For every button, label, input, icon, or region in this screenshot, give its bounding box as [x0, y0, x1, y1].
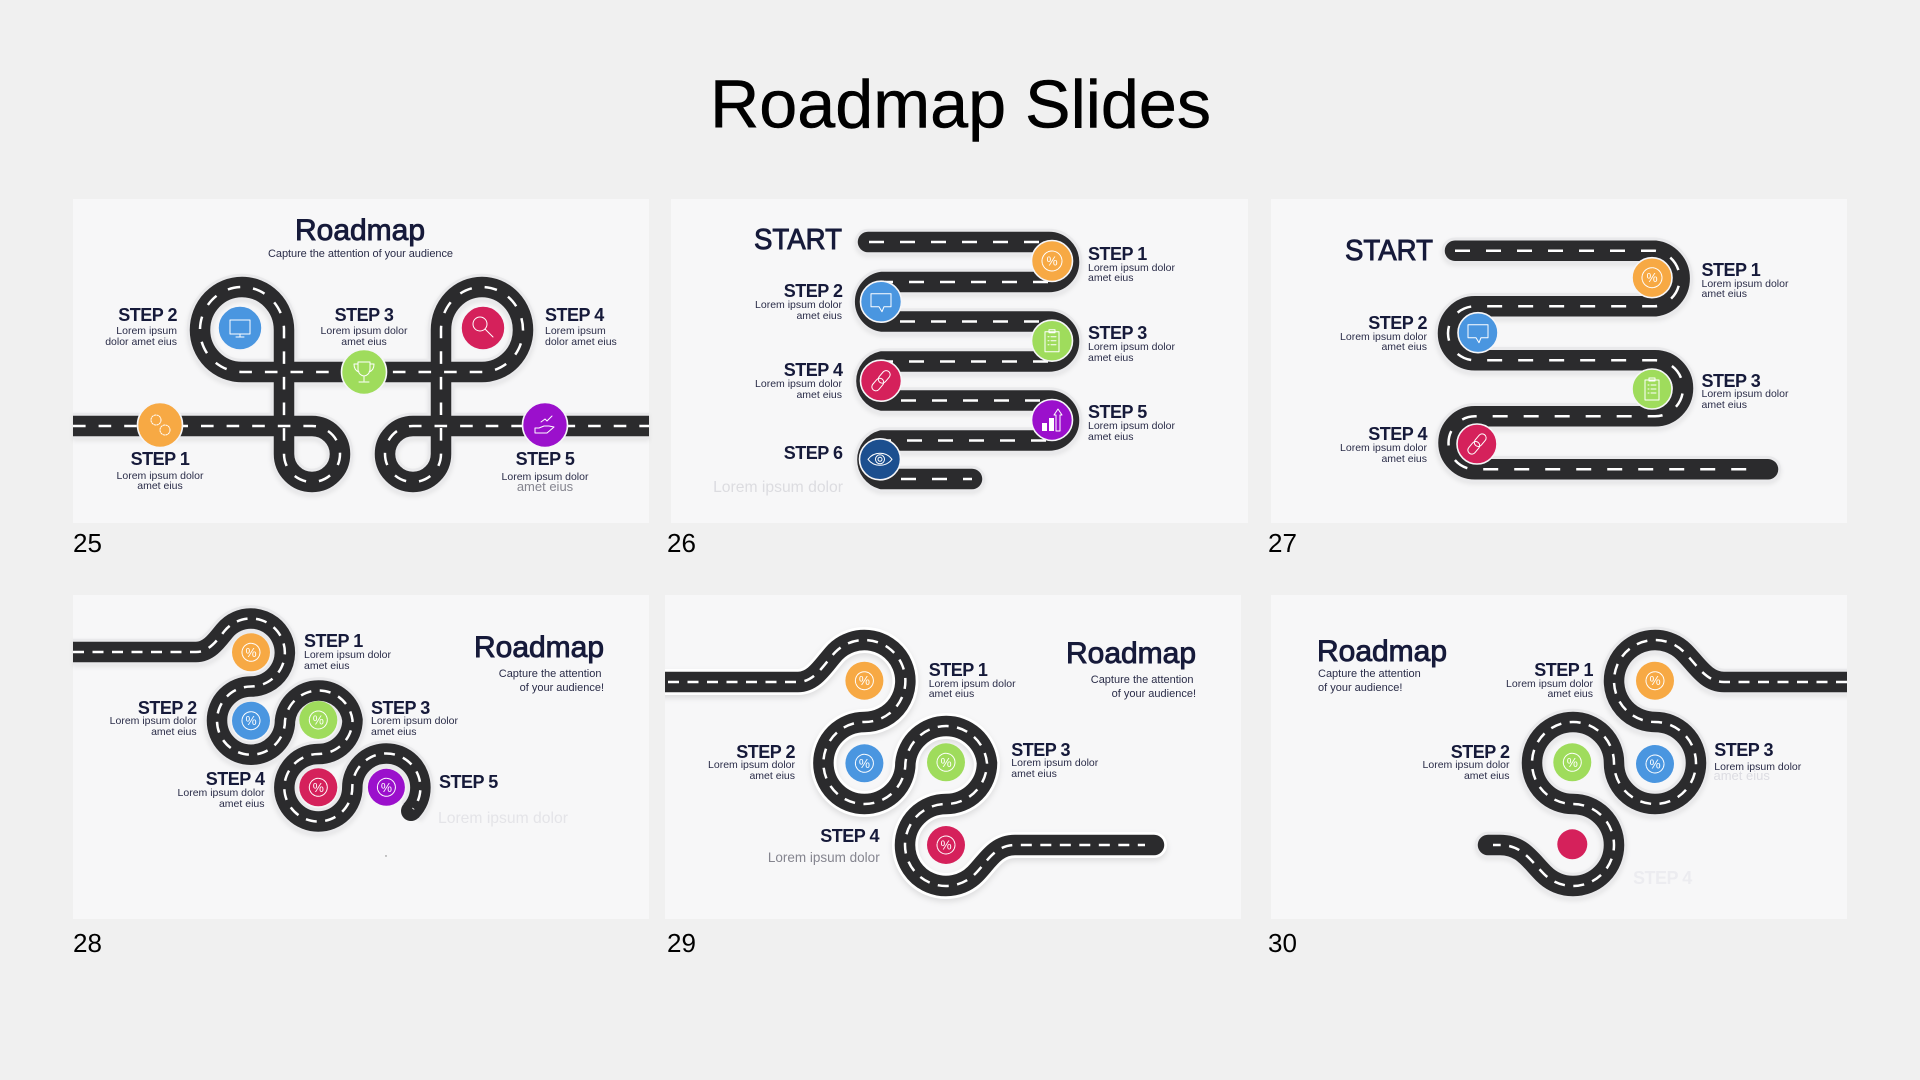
text: step 1: STEP 1 — [1702, 260, 1761, 280]
text: step 3 — [321, 305, 408, 348]
text: step 4 — [178, 769, 265, 810]
text: step 1 — [117, 449, 204, 492]
text: step 4: dolor amet eius — [545, 336, 617, 348]
text: step 4 — [1340, 424, 1428, 465]
marker: step 1 percent: % — [1646, 271, 1658, 285]
text: step 2 — [110, 698, 197, 738]
text: step 4: amet eius — [1381, 453, 1427, 465]
marker: step 1 percent — [1632, 258, 1672, 298]
text: step 2: Lorem ipsum dolor — [708, 759, 796, 771]
text: step 1: STEP 1 — [1534, 660, 1593, 680]
text: step 1 — [304, 631, 391, 672]
marker: step 2 percent: % — [1567, 756, 1578, 770]
text: step 5: Lorem ipsum dolor — [502, 471, 589, 483]
text: step 3 — [1011, 740, 1099, 780]
marker: step 5 percent — [368, 769, 405, 806]
text: step 1: STEP 1 — [929, 660, 988, 680]
text: step 3: STEP 3 — [1088, 323, 1147, 343]
road: slide 26 — [865, 242, 1069, 479]
text: step 2: Lorem ipsum dolor — [755, 299, 843, 311]
text: step 5: Lorem ipsum dolor — [438, 810, 568, 827]
subtitle: slide 30 — [1318, 668, 1421, 694]
text: step 4: STEP 4 — [1368, 424, 1427, 444]
text: step 4 — [768, 826, 880, 865]
text: step 6: STEP 6 — [784, 443, 843, 463]
text: step 1: Lorem ipsum dolor — [304, 649, 391, 661]
panel: slide 26 — [671, 199, 1248, 523]
marker: step 3 clipboard — [1632, 369, 1672, 409]
text: step 1: amet eius — [1547, 688, 1593, 700]
text: step 2: Lorem ipsum dolor — [1340, 331, 1428, 343]
text: step 5: STEP 5 — [1088, 402, 1147, 422]
marker: step 4 link — [1457, 424, 1497, 464]
text: step 3: Lorem ipsum dolor — [1714, 761, 1802, 773]
slide number 28: 28 — [73, 928, 102, 958]
marker: step 3 percent — [1636, 745, 1674, 783]
marker: step 4 magnifier — [461, 306, 505, 350]
heading: slide 25: Roadmap — [295, 214, 425, 247]
road: slide 28 — [73, 619, 421, 822]
panel: slide 30 — [1318, 630, 1847, 896]
marker: step 3 percent: % — [1649, 758, 1661, 772]
subtitle: slide 29 — [1091, 674, 1196, 700]
road: slide 30 — [1488, 640, 1860, 886]
text: step 3: amet eius — [1088, 352, 1134, 364]
marker: step 1 percent — [232, 633, 270, 671]
text: step 2: amet eius — [1464, 770, 1510, 782]
marker: step 1 percent: % — [245, 646, 257, 660]
marker: step 1 percent — [1636, 662, 1674, 700]
panel: slide 28 — [73, 595, 649, 919]
road: slide 25 — [73, 287, 649, 482]
text: step 2: amet eius — [749, 770, 795, 782]
text: step 2: amet eius — [151, 726, 197, 738]
text: step 4 — [755, 360, 843, 401]
panel: slide 27 — [1271, 199, 1847, 523]
text: step 1 — [1702, 260, 1789, 300]
marker: step 4 percent — [299, 768, 337, 806]
slide number 26: 26 — [667, 528, 696, 558]
marker: step 5 percent: % — [381, 781, 392, 795]
text: step 5: Lorem ipsum dolor — [1088, 420, 1175, 432]
text: step 4: Lorem ipsum dolor — [178, 787, 265, 799]
text: step 1: Lorem ipsum dolor — [1702, 278, 1789, 290]
text: step 3: amet eius — [1011, 768, 1057, 780]
marker: step 1 percent — [1032, 240, 1072, 282]
text: step 3: amet eius — [1714, 768, 1770, 783]
text: step 1: amet eius — [929, 688, 974, 700]
title: Roadmap Slides — [710, 66, 1211, 142]
road: slide 29 — [655, 640, 1154, 886]
text: step 4: STEP 4 — [784, 360, 843, 380]
text: step 4: STEP 4 — [545, 305, 604, 325]
text: step 4 — [545, 305, 617, 348]
text: step 4: STEP 4 — [820, 826, 879, 846]
text: step 1: Lorem ipsum dolor — [1506, 678, 1594, 690]
text: step 5: amet eius — [517, 479, 574, 494]
slide number 30: 30 — [1268, 928, 1297, 958]
text: step 5: STEP 5 — [439, 772, 498, 792]
text: step 5 — [502, 449, 589, 494]
text: step 2: dolor amet eius — [105, 336, 177, 348]
text: step 2: STEP 2 — [1451, 742, 1510, 762]
text: step 3: Lorem ipsum dolor — [1011, 757, 1099, 769]
text: step 3: amet eius — [341, 336, 387, 348]
heading: start: START — [754, 224, 842, 256]
subtitle: slide 29: Capture the attention — [1091, 674, 1194, 686]
text: step 4: Lorem ipsum — [545, 325, 606, 337]
subtitle: slide 29: of your audience! — [1112, 688, 1196, 700]
text: step 3: Lorem ipsum dolor — [371, 715, 458, 727]
text: step 1 — [1506, 660, 1594, 700]
subtitle: slide 25: Capture the attention of your audience — [268, 248, 453, 260]
text: step 4: Lorem ipsum dolor — [768, 850, 880, 865]
text: step 3 — [1714, 740, 1802, 783]
text: step 1: Lorem ipsum dolor — [1088, 262, 1175, 274]
speck — [385, 855, 387, 857]
text: step 1: STEP 1 — [304, 631, 363, 651]
text: step 2 — [105, 305, 177, 348]
marker: step 4 percent: % — [313, 781, 324, 795]
marker: step 3 percent: % — [940, 756, 952, 770]
text: step 2: Lorem ipsum dolor — [110, 715, 197, 727]
text: step 2 — [708, 742, 796, 782]
slide number 25: 25 — [73, 528, 102, 558]
text: step 2: amet eius — [796, 310, 842, 322]
marker: step 2 percent — [1553, 743, 1591, 781]
panel: slide 29 — [665, 627, 1196, 901]
slide number 29: 29 — [667, 928, 696, 958]
marker: step 4 dot — [1557, 829, 1587, 859]
subtitle: slide 30: Capture the attention — [1318, 668, 1421, 680]
text: step 4: amet eius — [796, 389, 842, 401]
text: step 2 — [1340, 313, 1428, 353]
marker: step 2 percent: % — [245, 714, 257, 728]
marker: step 2 monitor — [218, 306, 262, 350]
text: step 3: Lorem ipsum dolor — [321, 325, 408, 337]
marker: step 5 hand chart — [522, 402, 568, 448]
text: step 4: STEP 4 — [206, 769, 265, 789]
text: step 1: amet eius — [137, 480, 183, 492]
slide number 27: 27 — [1268, 528, 1297, 558]
text: step 4: amet eius — [219, 798, 264, 810]
text: step 3: amet eius — [371, 726, 417, 738]
text: step 5 — [1088, 402, 1175, 443]
text: step 2 — [755, 281, 843, 322]
text: step 6 — [713, 443, 843, 496]
marker: step 2 percent — [845, 744, 883, 782]
marker: step 3 percent — [299, 701, 337, 739]
marker: step 3 trophy — [342, 350, 386, 394]
marker: step 2 percent: % — [859, 757, 870, 771]
road: slide 27 — [1448, 251, 1768, 469]
text: step 2: Lorem ipsum — [116, 325, 177, 337]
text: step 1: amet eius — [1088, 272, 1134, 284]
text: step 1: amet eius — [1702, 288, 1747, 300]
marker: step 4 percent — [927, 826, 965, 864]
text: step 2: STEP 2 — [736, 742, 795, 762]
text: step 3: Lorem ipsum dolor — [1702, 388, 1789, 400]
marker: step 4 percent: % — [940, 838, 952, 852]
text: step 2: Lorem ipsum dolor — [1423, 759, 1510, 771]
text: step 4: Lorem ipsum dolor — [1340, 442, 1428, 454]
text: step 5: amet eius — [1088, 431, 1134, 443]
text: step 3 — [1702, 371, 1789, 411]
marker: step 1 percent: % — [1046, 254, 1058, 268]
marker: step 3 percent: % — [313, 714, 324, 728]
heading: start: START — [1345, 235, 1433, 267]
marker: step 3 percent — [927, 743, 965, 781]
heading: slide 28: Roadmap — [474, 631, 604, 664]
text: step 3: amet eius — [1702, 399, 1747, 411]
heading: slide 30: Roadmap — [1317, 635, 1447, 668]
text: step 1 — [929, 660, 1016, 700]
subtitle: slide 30: of your audience! — [1318, 682, 1402, 694]
subtitle: slide 28: Capture the attention — [499, 668, 602, 680]
text: step 2: STEP 2 — [138, 698, 197, 718]
text: step 5 — [438, 772, 568, 827]
text: step 1: amet eius — [304, 660, 350, 672]
text: step 1: Lorem ipsum dolor — [117, 470, 204, 482]
marker: step 2 chat — [860, 281, 902, 322]
text: step 3 — [371, 698, 458, 738]
text: step 1: STEP 1 — [131, 449, 190, 469]
marker: step 1 percent: % — [859, 674, 870, 688]
text: step 4: Lorem ipsum dolor — [755, 378, 843, 390]
panel: slide 25 — [73, 199, 649, 523]
marker: step 2 chat — [1458, 313, 1498, 353]
text: step 1: Lorem ipsum dolor — [929, 678, 1016, 690]
heading: slide 29: Roadmap — [1066, 637, 1196, 670]
marker: step 3 clipboard — [1032, 320, 1072, 361]
text: step 1 — [1088, 244, 1175, 284]
text: step 2: amet eius — [1381, 341, 1427, 353]
text: step 2: STEP 2 — [1368, 313, 1427, 333]
text: step 3: STEP 3 — [1011, 740, 1070, 760]
text: step 3: STEP 3 — [1702, 371, 1761, 391]
text: step 2: STEP 2 — [118, 305, 177, 325]
marker: step 4 link — [860, 360, 902, 401]
marker: step 2 percent — [232, 702, 270, 740]
marker: step 6 eye — [860, 439, 900, 480]
text: step 1: STEP 1 — [1088, 244, 1147, 264]
text: step 3: STEP 3 — [371, 698, 430, 718]
marker: step 5 bars — [1032, 400, 1072, 440]
text: step 2 — [1423, 742, 1510, 782]
subtitle: slide 28 — [499, 668, 604, 694]
subtitle: slide 28: of your audience! — [520, 682, 604, 694]
marker: step 1 percent — [845, 662, 883, 700]
text: step 3: Lorem ipsum dolor — [1088, 341, 1175, 353]
text: step 2: STEP 2 — [784, 281, 843, 301]
text: step 3: STEP 3 — [1714, 740, 1773, 760]
text: step 6: Lorem ipsum dolor — [713, 479, 843, 496]
marker: step 1 percent: % — [1649, 674, 1661, 688]
text: step 3: STEP 3 — [335, 305, 394, 325]
text: step 5: STEP 5 — [516, 449, 575, 469]
text: step 3 — [1088, 323, 1175, 364]
text: step 4 (fading): STEP 4 — [1633, 868, 1692, 888]
marker: step 1 gears — [138, 402, 182, 448]
